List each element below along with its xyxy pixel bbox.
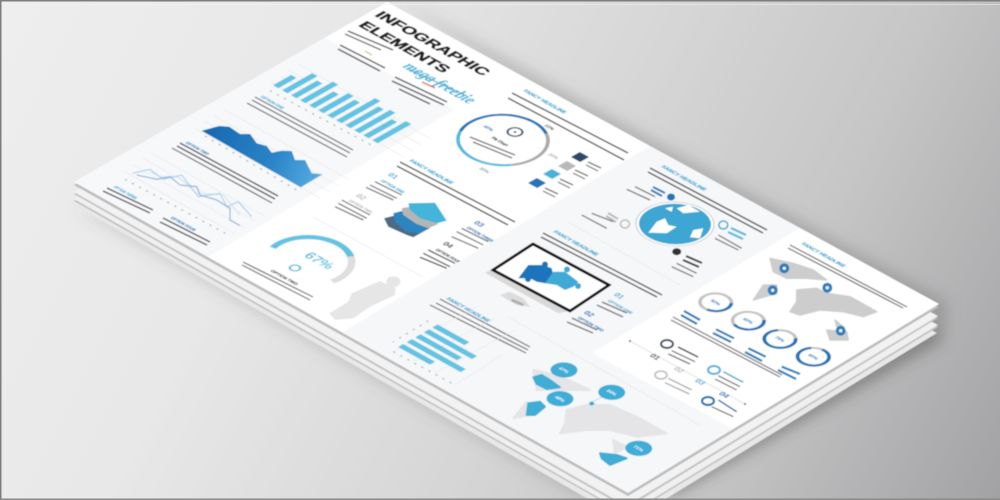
icon: clock — [504, 126, 526, 138]
heading: FANCY HEADLINE — [521, 89, 568, 115]
bubble 71% — [620, 438, 658, 459]
timeline step 2 — [655, 371, 692, 394]
text block: option three: OPTION THREE — [112, 185, 139, 200]
heading: FANCY HEADLINE — [407, 159, 455, 186]
label 01: OPTION ONE — [379, 179, 406, 194]
text block: option three — [103, 185, 153, 213]
body text — [508, 93, 628, 160]
title — [354, 10, 494, 106]
title intro text — [338, 31, 447, 105]
body text — [541, 233, 662, 297]
dotted world map — [753, 258, 877, 340]
body text — [788, 245, 907, 308]
text block: option two: OPTION TWO — [184, 141, 211, 156]
label 01 — [366, 172, 406, 200]
panel: bubble map — [513, 359, 667, 465]
bubble 47%: 47% — [556, 367, 571, 375]
pie chart caption: Pie Chart — [490, 136, 510, 147]
ring labels: 10% — [542, 124, 556, 132]
panel: left charts column — [74, 10, 516, 257]
icon: person — [329, 276, 400, 320]
bubble 34% — [593, 382, 631, 403]
panel: monitor puzzle — [485, 230, 662, 333]
panel: layers — [313, 159, 515, 277]
ring labels: 40% — [481, 125, 495, 133]
title: mega freebie — [399, 60, 482, 106]
panel: horizontal bars — [393, 297, 530, 385]
text block: option four — [160, 216, 210, 245]
label 01: OPTION ONE — [606, 299, 634, 315]
ring labels — [477, 124, 560, 175]
body text — [430, 299, 530, 353]
text block: option four: OPTION FOUR — [169, 216, 198, 232]
ring gauge 3: 75% — [772, 336, 787, 344]
timeline step 3 — [708, 366, 743, 390]
label 01: 01 — [385, 172, 401, 181]
text block: option one — [247, 95, 353, 157]
bubble 71%: 71% — [631, 445, 645, 453]
ring gauge 4: 90% — [806, 353, 820, 361]
bubble 34%: 34% — [604, 389, 618, 397]
icon: gauge symbol — [288, 264, 302, 272]
body text — [397, 162, 515, 225]
label 04 — [420, 241, 463, 268]
layered stack icon — [384, 203, 447, 237]
heading: FANCY HEADLINE — [444, 297, 492, 324]
timeline — [629, 340, 746, 405]
ring gauge 3 — [749, 321, 811, 357]
panel: right light columns — [342, 146, 800, 493]
body text — [648, 168, 767, 233]
heading: FANCY HEADLINE — [551, 230, 600, 257]
ring gauge 1: 50% — [708, 299, 722, 307]
label 02: 02 — [581, 310, 597, 319]
bubble 48% — [541, 388, 579, 409]
timeline step 1 — [661, 340, 698, 364]
globe callout: right — [715, 221, 746, 250]
label 04: OPTION FOUR — [434, 248, 463, 264]
panel: pie chart — [414, 89, 628, 197]
label 02 — [335, 193, 374, 220]
ring labels — [681, 311, 800, 379]
ring chart — [414, 90, 592, 190]
ring gauge 2: 60% — [741, 317, 755, 325]
icon: puzzle pieces — [518, 262, 581, 290]
label 02: 02 — [353, 193, 369, 202]
bar chart — [270, 63, 431, 157]
label 03 — [452, 220, 495, 248]
gauge arc — [225, 214, 393, 308]
horizontal bar chart — [393, 306, 515, 385]
ring labels: 20% — [546, 153, 560, 161]
label 01: 01 — [611, 292, 627, 301]
label 03: 03 — [471, 220, 487, 229]
timeline: 01 — [647, 353, 663, 362]
heading: FANCY HEADLINE — [799, 242, 847, 269]
panel: 67 percent gauge — [225, 214, 400, 320]
map markers — [768, 263, 846, 336]
ring gauge 4 — [788, 342, 839, 371]
pie chart caption — [470, 136, 515, 158]
title: INFOGRAPHIC — [371, 10, 494, 78]
globe — [620, 193, 730, 255]
gauge caption: OPTION TWO — [269, 269, 300, 286]
label 02: OPTION TWO — [347, 199, 374, 214]
gauge caption — [242, 262, 313, 300]
legend squares — [528, 152, 601, 197]
area chart — [195, 109, 348, 198]
timeline: 04 — [716, 391, 732, 400]
panel: globe — [582, 165, 767, 277]
label 02 — [567, 310, 606, 333]
timeline: 03 — [692, 378, 708, 387]
ring gauge 1 — [684, 285, 747, 320]
bubble 48%: 48% — [552, 395, 567, 403]
world map — [513, 370, 667, 465]
line chart — [123, 153, 264, 234]
timeline step 4 — [702, 397, 737, 417]
heading: FANCY HEADLINE — [659, 165, 708, 192]
panel: dotted map and rings — [592, 228, 939, 429]
globe callout: bottom — [672, 248, 702, 277]
label 04: 04 — [440, 241, 456, 250]
text block: option two — [172, 141, 278, 203]
globe callout: top — [627, 187, 675, 200]
body text under rings — [671, 317, 782, 377]
ring gauge 2 — [717, 303, 780, 338]
globe callout: left — [582, 213, 630, 228]
monitor — [485, 244, 609, 313]
title: ELEMENTS — [354, 20, 454, 75]
label 02: OPTION TWO — [576, 316, 606, 332]
label 01 — [597, 292, 634, 317]
timeline: 02 — [671, 366, 687, 375]
text block: option one: OPTION ONE — [259, 95, 286, 110]
label 03: OPTION THREE — [465, 226, 495, 243]
ring labels: 30% — [477, 167, 491, 175]
gauge value: 67% — [300, 250, 339, 272]
bubble 47% — [545, 359, 583, 381]
